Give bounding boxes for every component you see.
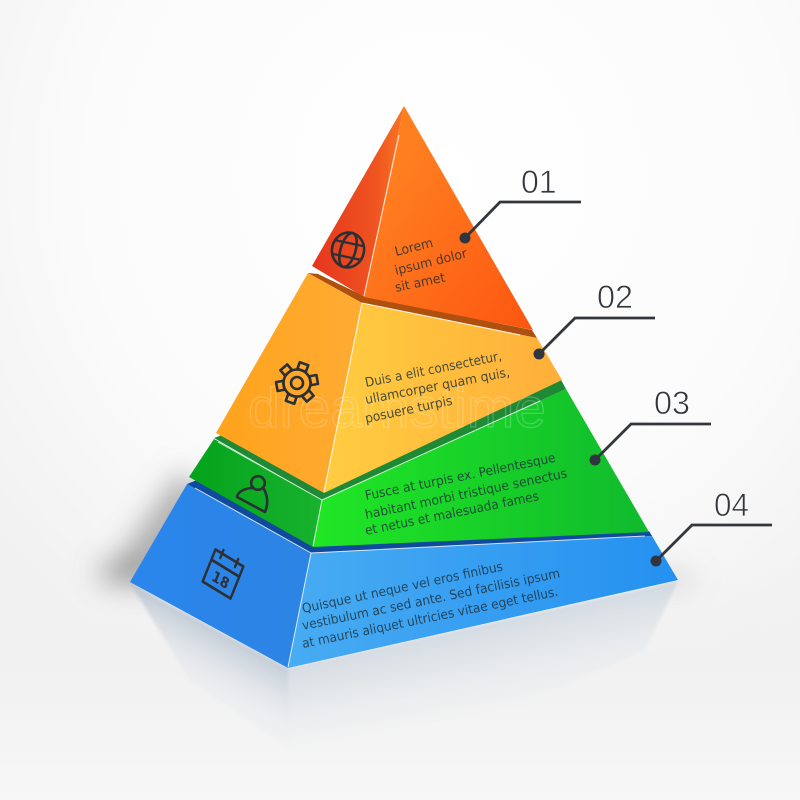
callout 02: 02 xyxy=(597,279,633,315)
dark green top edge xyxy=(214,378,566,500)
callout 01 xyxy=(460,164,581,244)
text block layer 1: Lorem xyxy=(393,236,435,260)
text block layer 2: ullamcorper quam quis, xyxy=(364,365,511,408)
text block layer 4: vestibulum ac sed ante. Sed facilisis ipsum xyxy=(301,566,561,634)
text block layer 2: Duis a elit consectetur, xyxy=(364,349,503,391)
floor band xyxy=(0,560,800,800)
callout 02 xyxy=(534,279,655,360)
pyramid cast shadow xyxy=(96,470,700,588)
text block layer 1 xyxy=(393,236,469,296)
blue left face xyxy=(130,484,311,668)
pyramid xyxy=(130,106,678,668)
text block layer 1: sit amet xyxy=(394,271,447,296)
text block layer 3 xyxy=(364,451,569,539)
watermark: dreamstime xyxy=(248,376,546,439)
brown top edge xyxy=(308,273,537,338)
blue right face xyxy=(288,536,678,668)
callout 03 xyxy=(590,385,711,466)
blue highlights xyxy=(195,488,645,667)
text block layer 4: at mauris aliquet ultricies vitae eget tellus. xyxy=(301,585,559,652)
callout 01: 01 xyxy=(521,164,557,200)
text block layer 2: posuere turpis xyxy=(364,394,454,427)
yellow right face xyxy=(324,303,562,493)
callout 04 xyxy=(650,487,772,566)
text block layer 2 xyxy=(364,349,511,427)
text block layer 3: Fusce at turpis ex. Pellentesque xyxy=(364,451,557,504)
text block layer 1: ipsum dolor xyxy=(393,246,469,279)
panel: layer 1 orange xyxy=(312,106,533,330)
text block layer 3: et netus et malesuada fames xyxy=(364,489,541,539)
callout 03: 03 xyxy=(654,385,690,421)
icon: person xyxy=(237,476,267,512)
reflection under pyramid xyxy=(130,581,678,750)
orange right face xyxy=(364,106,533,330)
text block layer 3: habitant morbi tristique senectus xyxy=(364,466,569,523)
icon: calendar xyxy=(203,546,245,599)
icon: globe xyxy=(329,229,367,271)
green right face xyxy=(313,389,649,547)
panel: layer 2 yellow xyxy=(216,273,562,493)
yellow left face xyxy=(216,273,362,493)
dark blue top edge xyxy=(187,480,652,553)
green highlights xyxy=(218,401,540,546)
yellow highlights xyxy=(324,303,520,492)
icon: calendar: 18 xyxy=(209,568,231,593)
panel: layer 4 blue xyxy=(130,480,678,668)
green left face xyxy=(189,439,322,547)
text block layer 4: Quisque ut neque vel eros finibus xyxy=(301,560,505,617)
orange ridge highlight xyxy=(364,135,399,296)
callout 04: 04 xyxy=(714,487,749,523)
panel: layer 3 green xyxy=(189,378,649,547)
icon: gear xyxy=(276,362,318,404)
orange left face xyxy=(312,106,404,297)
